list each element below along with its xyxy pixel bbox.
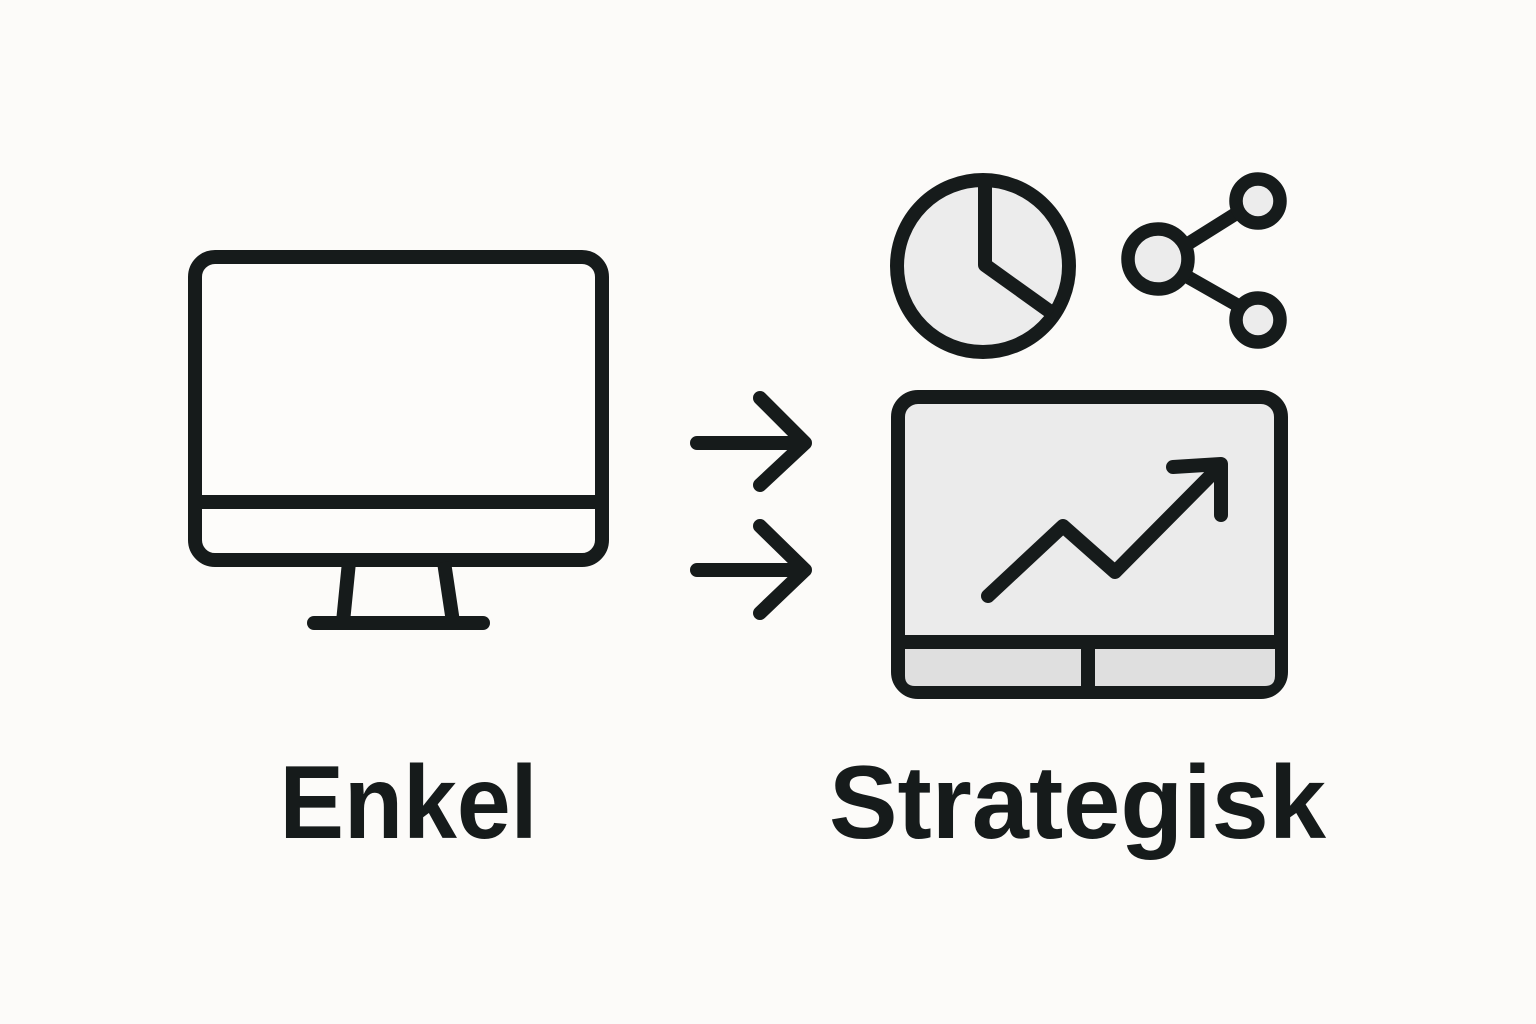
- arrow: lower: [697, 526, 805, 613]
- icon: pie chart: [897, 180, 1069, 352]
- arrow: upper: [697, 398, 805, 485]
- icon: share network: [1128, 179, 1280, 342]
- label: Strategisk: Strategisk: [829, 745, 1326, 861]
- label: Enkel: Enkel: [280, 745, 538, 861]
- dashboard lower panels: [905, 649, 1275, 686]
- icon: simple monitor: [195, 257, 602, 623]
- icon: strategic dashboard: [898, 397, 1281, 692]
- trend line arrow: [988, 464, 1221, 596]
